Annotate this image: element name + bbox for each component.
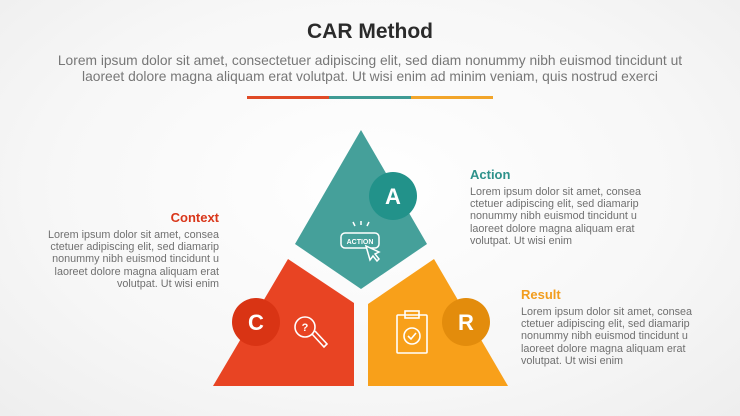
panel: context text: ctetuer adipiscing elit, sed diamarip: [50, 241, 219, 253]
panel: result text: nonummy nibh euismod tincidunt u: [521, 330, 688, 342]
panel: action text: volutpat. Ut wisi enim: [470, 235, 572, 247]
panel: result text: Lorem ipsum dolor sit amet, consea: [521, 306, 692, 318]
panel: result text: laoreet dolore magna aliquam erat: [521, 343, 685, 355]
segment: action: ACTION: [347, 239, 373, 246]
panel: context text: Lorem ipsum dolor sit amet, consea: [48, 229, 219, 241]
panel: action text: laoreet dolore magna aliquam erat: [470, 223, 634, 235]
subtitle text: [58, 53, 682, 84]
panel: result text: volutpat. Ut wisi enim: [521, 355, 623, 367]
title underline: [247, 96, 493, 99]
panel: action text: Lorem ipsum dolor sit amet, consea: [470, 186, 641, 198]
circle C: C: [248, 310, 264, 335]
panel: action text: Action: [470, 167, 510, 182]
circle R: R: [458, 310, 474, 335]
icon: magnifier question: [295, 317, 327, 347]
circle C: [232, 298, 280, 346]
icon: clipboard check: [397, 311, 427, 353]
icon: action button: [341, 221, 379, 261]
panel: result text: ctetuer adipiscing elit, sed diamarip: [521, 318, 690, 330]
subtitle text: Lorem ipsum dolor sit amet, consectetuer adipiscing elit, sed diam nonummy nibh euismod tincidunt ut: [58, 53, 682, 68]
panel: context text: Context: [171, 210, 219, 225]
circle A: A: [385, 184, 401, 209]
circle A: [369, 172, 417, 220]
panel: context text: [48, 210, 219, 290]
segment: context: [213, 259, 354, 386]
segment: context: ?: [302, 322, 309, 334]
panel: action text: nonummy nibh euismod tincidunt u: [470, 210, 637, 222]
panel: result text: Result: [521, 287, 561, 302]
panel: result text: [521, 287, 692, 367]
segment: result: [368, 259, 508, 386]
panel: context text: volutpat. Ut wisi enim: [117, 278, 219, 290]
title: CAR Method: [307, 20, 433, 43]
subtitle text: laoreet dolore magna aliquam erat volutpat. Ut wisi enim ad minim veniam, quis nostrud exerci: [82, 69, 658, 84]
panel: context text: laoreet dolore magna aliquam erat: [55, 266, 219, 278]
panel: action text: [470, 167, 641, 247]
panel: action text: ctetuer adipiscing elit, sed diamarip: [470, 198, 639, 210]
segment: action: [295, 130, 427, 289]
panel: context text: nonummy nibh euismod tincidunt u: [52, 253, 219, 265]
